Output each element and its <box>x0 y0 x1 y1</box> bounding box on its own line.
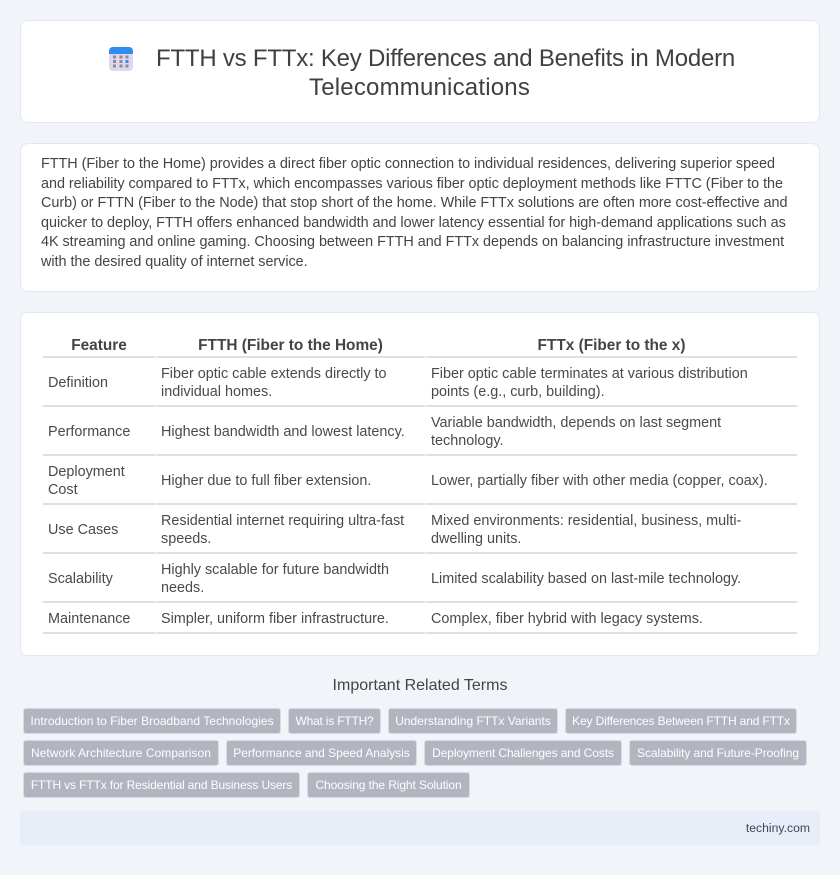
row: deployment cost: Cost <box>48 482 78 498</box>
row: scalability: Scalability <box>48 571 113 587</box>
tag <box>23 740 219 766</box>
row: performance: Variable bandwidth, depends on last segment <box>431 415 721 431</box>
row: deployment cost <box>48 464 768 498</box>
row: definition: individual homes. <box>161 384 272 400</box>
title <box>156 45 735 101</box>
row: scalability <box>48 562 741 596</box>
row: deployment cost: Higher due to full fiber extension. <box>161 473 371 489</box>
intro paragraph <box>41 156 787 270</box>
title: Telecommunications <box>309 74 530 101</box>
table header: FTTx (Fiber to the x) <box>538 337 685 354</box>
row: maintenance: Simpler, uniform fiber infrastructure. <box>161 611 389 627</box>
row: definition: Fiber optic cable terminates at various distribution <box>431 366 748 382</box>
title: FTTH vs FTTx: Key Differences and Benefits in Modern <box>156 45 735 72</box>
tag <box>23 772 300 798</box>
intro paragraph: Curb) or FTTN (Fiber to the Node) that stop short of the home. While FTTx solutions are often more cost-effective and <box>41 195 787 211</box>
tag <box>388 708 558 734</box>
intro paragraph: and reliability compared to FTTx, which encompasses various fiber optic deployment methods like FTTC (Fiber to the <box>41 176 783 192</box>
row: use cases: speeds. <box>161 531 211 547</box>
comparison table <box>43 337 797 634</box>
tag: Deployment Challenges and Costs <box>432 746 614 760</box>
tag <box>288 708 381 734</box>
related terms heading: Important Related Terms <box>333 677 507 694</box>
footer bar <box>20 811 820 845</box>
row: performance: Highest bandwidth and lowest latency. <box>161 424 405 440</box>
icon: calendar <box>109 47 133 71</box>
row: scalability: Highly scalable for future bandwidth <box>161 562 389 578</box>
row: scalability: Limited scalability based on last-mile technology. <box>431 571 741 587</box>
related terms tags <box>23 708 807 798</box>
row: performance: Performance <box>48 424 130 440</box>
table header <box>71 337 685 354</box>
tag: Key Differences Between FTTH and FTTx <box>572 714 790 728</box>
tag <box>565 708 797 734</box>
tag: What is FTTH? <box>295 714 374 728</box>
row: definition: Definition <box>48 375 108 391</box>
tag <box>424 740 622 766</box>
row: definition: points (e.g., curb, building). <box>431 384 605 400</box>
row: use cases: Residential internet requiring ultra-fast <box>161 513 404 529</box>
tag: Introduction to Fiber Broadband Technologies <box>30 714 274 728</box>
intro paragraph: with the desired quality of internet service. <box>41 254 308 270</box>
row: performance <box>48 415 722 449</box>
intro paragraph: 4K streaming and online gaming. Choosing between FTTH and FTTx depends on balancing infrastructure investment <box>41 234 784 250</box>
tag: Choosing the Right Solution <box>315 778 462 792</box>
row: performance: technology. <box>431 433 504 449</box>
row: use cases <box>48 513 741 547</box>
table header: FTTH (Fiber to the Home) <box>198 337 383 354</box>
tag: FTTH vs FTTx for Residential and Business Users <box>31 778 292 792</box>
row: deployment cost: Deployment <box>48 464 125 480</box>
panel: title header <box>20 20 820 123</box>
tag <box>226 740 417 766</box>
table header: Feature <box>71 337 127 354</box>
row: definition <box>48 366 748 400</box>
panel: intro text <box>20 143 820 292</box>
tag <box>629 740 807 766</box>
row: maintenance <box>48 611 703 627</box>
footer credit: techiny.com <box>746 821 810 835</box>
tag <box>23 708 281 734</box>
intro paragraph: quicker to deploy, FTTH offers enhanced bandwidth and lower latency essential for high-demand applications such as <box>41 214 786 230</box>
row: use cases: Mixed environments: residential, business, multi- <box>431 513 741 529</box>
row: scalability: needs. <box>161 580 204 596</box>
row: maintenance: Complex, fiber hybrid with legacy systems. <box>431 611 703 627</box>
row: definition: Fiber optic cable extends directly to <box>161 366 387 382</box>
tag: Network Architecture Comparison <box>31 746 211 760</box>
tag: Performance and Speed Analysis <box>233 746 410 760</box>
intro paragraph: FTTH (Fiber to the Home) provides a direct fiber optic connection to individual residences, delivering superior speed <box>41 156 775 172</box>
tag: Scalability and Future-Proofing <box>637 746 799 760</box>
row: use cases: Use Cases <box>48 522 118 538</box>
row: maintenance: Maintenance <box>48 611 130 627</box>
tag: Understanding FTTx Variants <box>395 714 551 728</box>
panel: comparison table <box>20 312 820 656</box>
tag <box>307 772 470 798</box>
row: deployment cost: Lower, partially fiber with other media (copper, coax). <box>431 473 768 489</box>
row: use cases: dwelling units. <box>431 531 521 547</box>
